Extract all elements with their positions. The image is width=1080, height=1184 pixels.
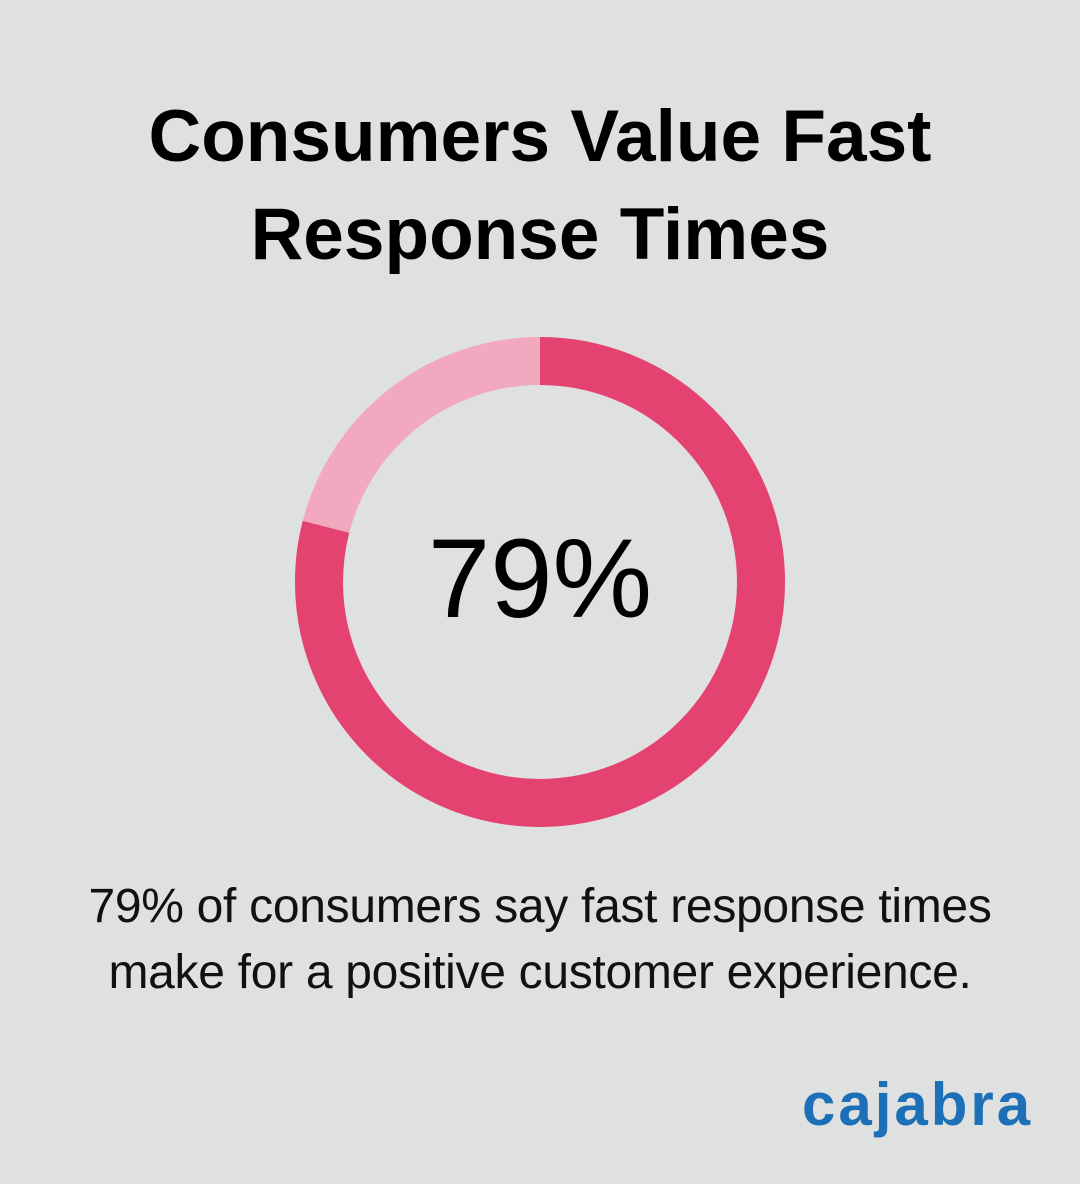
title [148, 96, 932, 275]
body text [88, 880, 992, 999]
donut chart: 79% [428, 516, 652, 641]
logo: cajabra [802, 1071, 1033, 1138]
title: Consumers Value Fast [148, 96, 932, 177]
body text: make for a positive customer experience. [108, 946, 972, 999]
title: Response Times [251, 194, 829, 275]
body text: 79% of consumers say fast response times [88, 880, 992, 933]
